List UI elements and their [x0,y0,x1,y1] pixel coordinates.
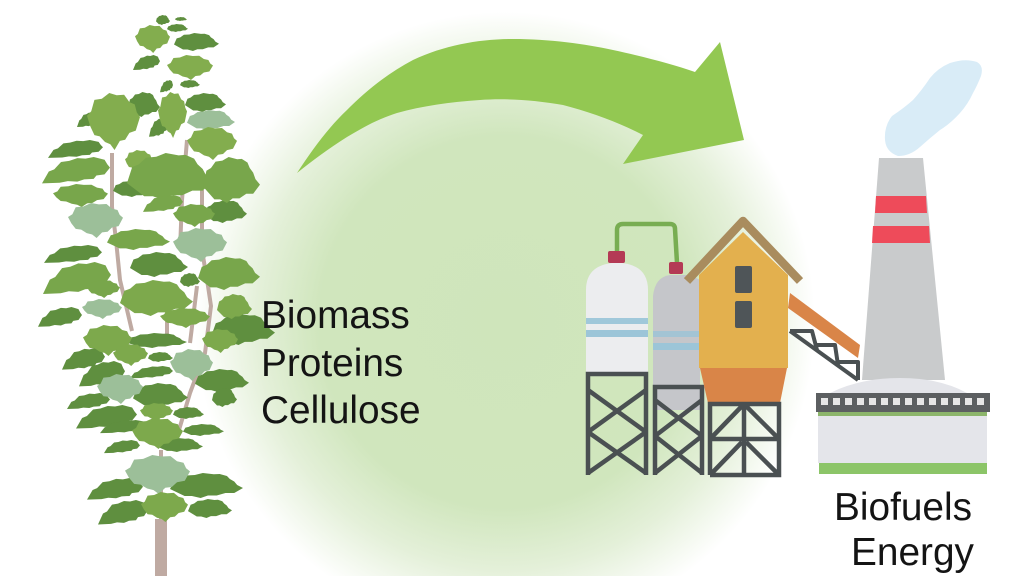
curved green arrow [297,39,744,173]
windows [735,266,752,328]
tank support frames [588,374,702,475]
chimney red bands [872,196,930,243]
biorefinery tanks and house [586,221,860,475]
grey tank [653,262,700,410]
green pipe [617,224,677,263]
label: biomass text: Biomass [261,294,410,337]
plant building [818,416,987,463]
pale lower leaves [82,299,213,494]
white tank [586,251,648,372]
dome [830,378,967,393]
roof [687,221,800,281]
power plant [816,60,990,474]
tree trunk and stems [112,140,211,576]
label: biofuels text: Biofuels [834,486,972,529]
pale upper leaves [68,110,235,262]
hopper [700,368,787,403]
label: biofuels text: Energy [851,531,975,574]
tree [38,15,275,576]
upper leaves [44,15,247,287]
conveyor truss [790,331,858,380]
label: biomass text: Cellulose [261,389,421,432]
chimney [862,158,945,380]
lower leaves [38,307,275,524]
house support frame [710,404,779,475]
conveyor belt [788,293,860,358]
roof band [816,393,990,412]
label: biomass text: Proteins [261,342,403,385]
house body [699,232,788,368]
smoke cloud [885,60,982,156]
